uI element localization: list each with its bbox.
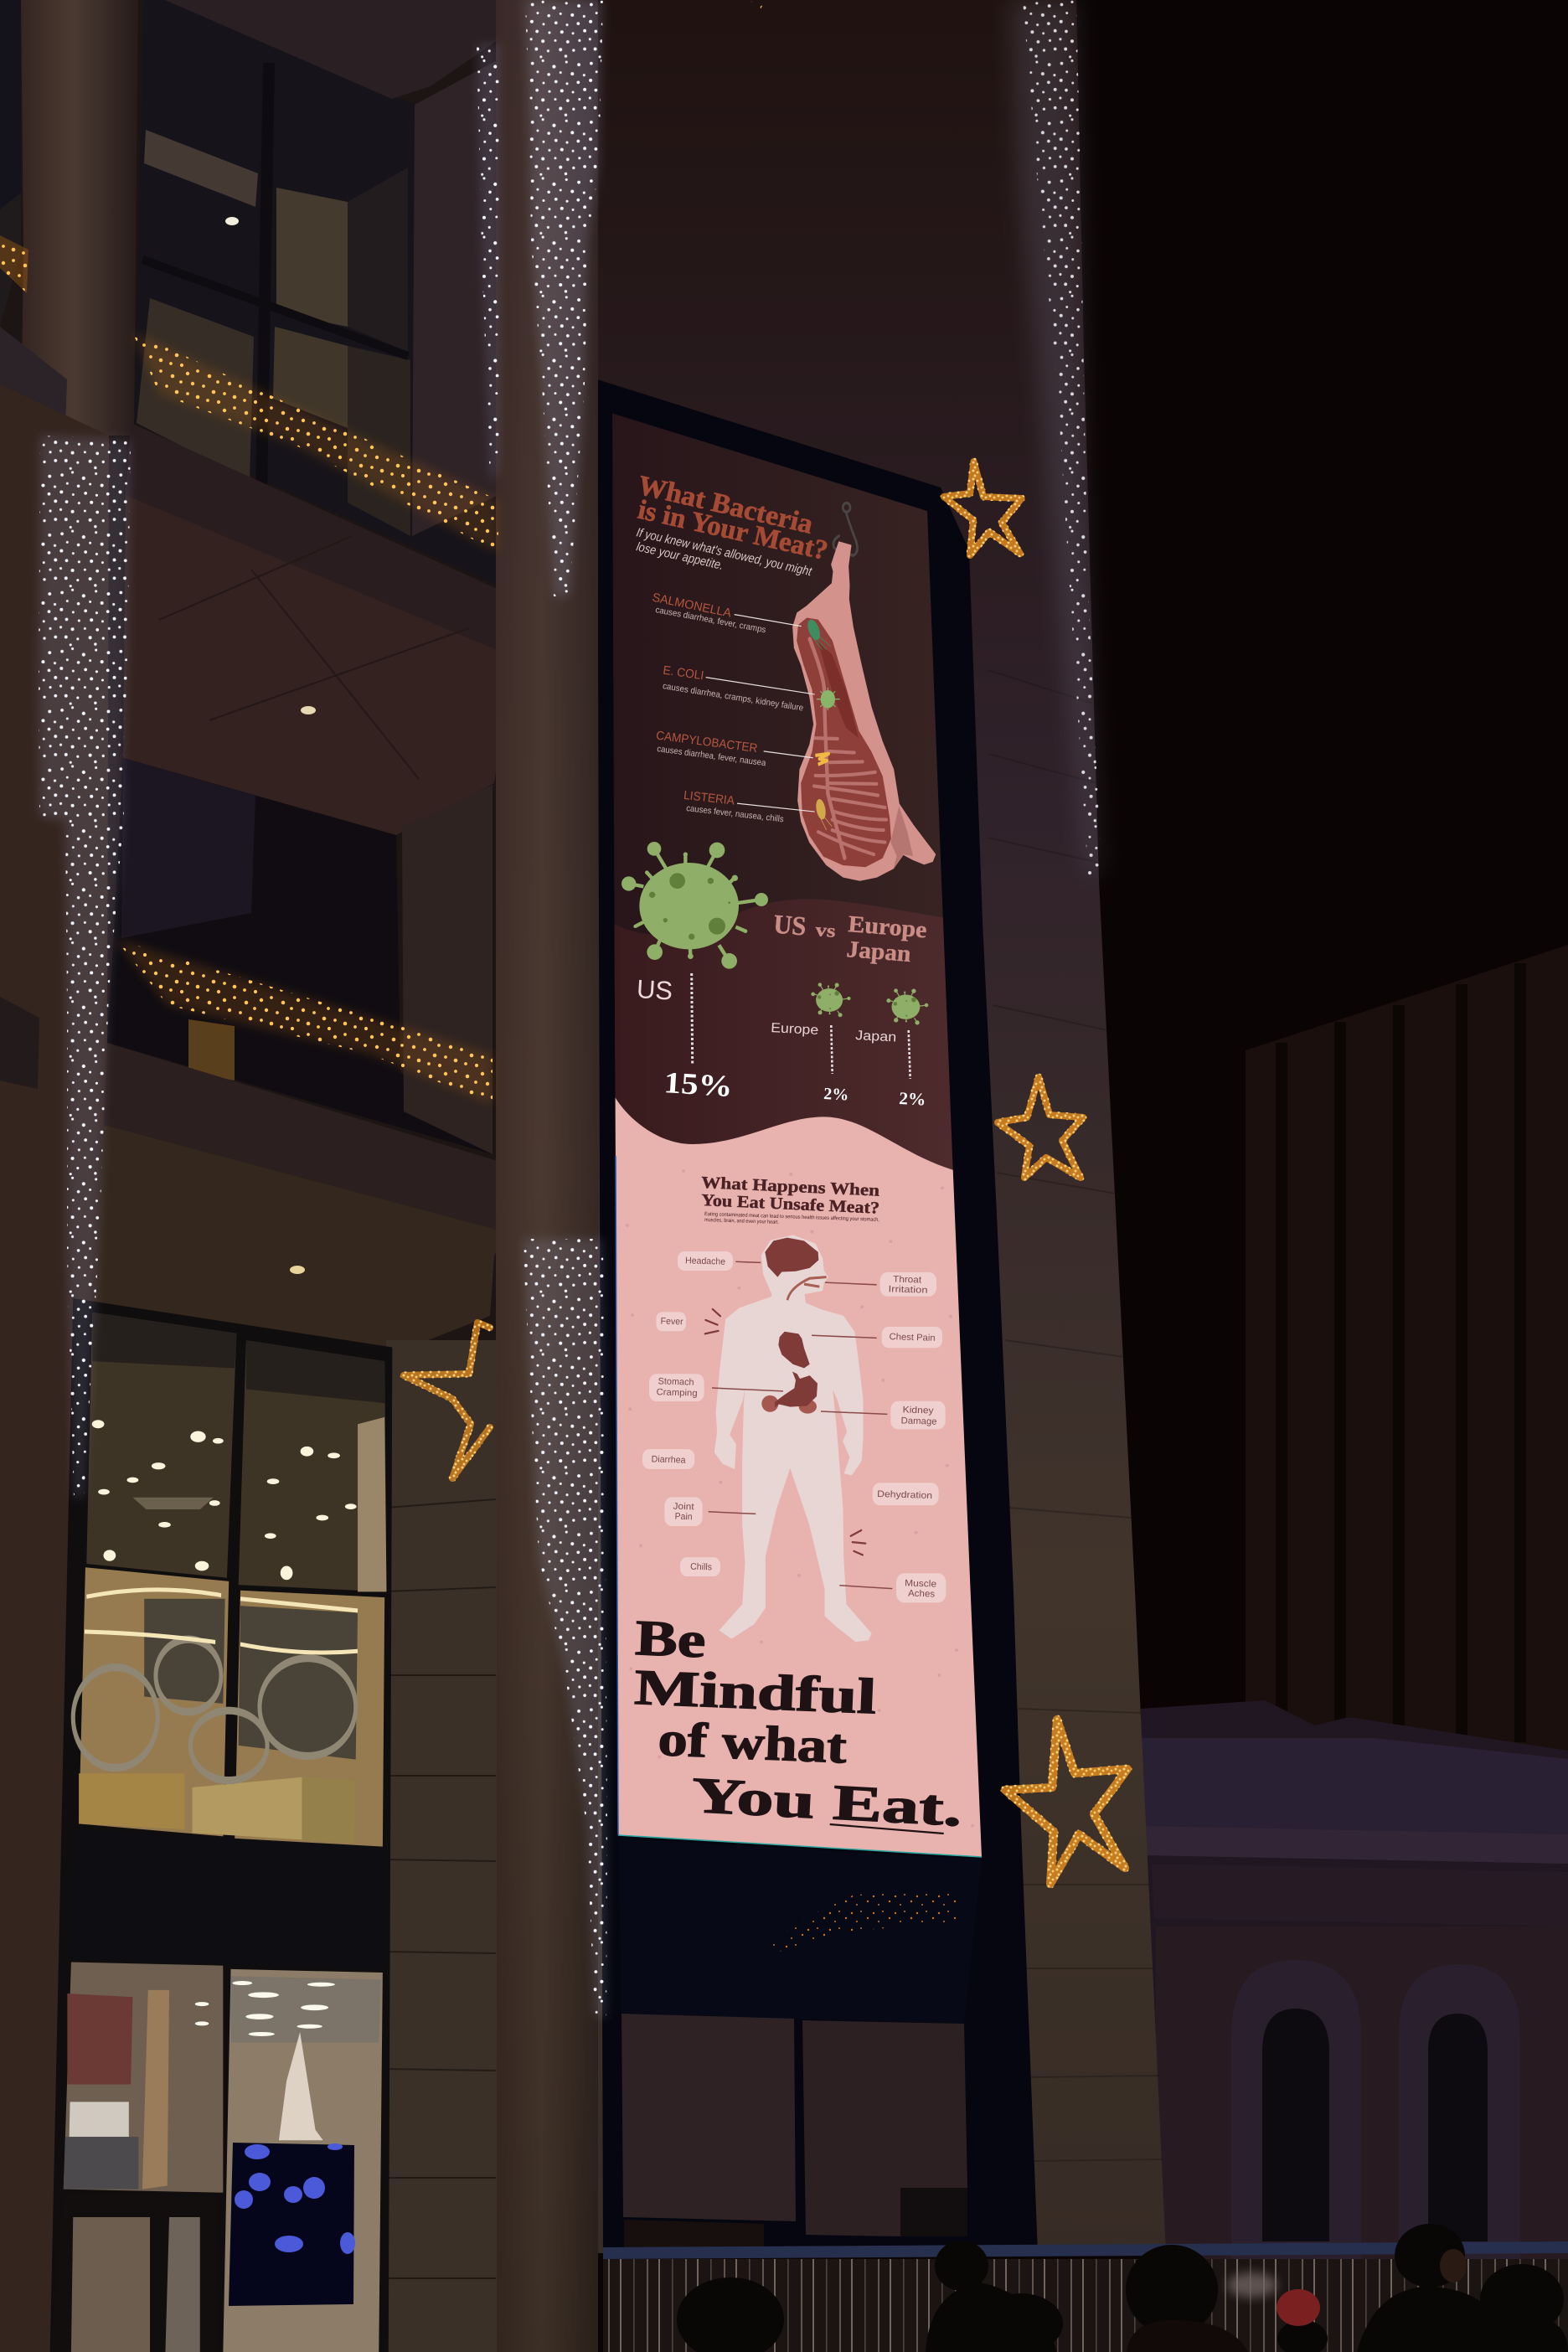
pain ticks	[705, 1309, 865, 1555]
lobby star	[404, 1323, 490, 1478]
billboard poster	[612, 414, 982, 1856]
symptom labels: Cramping	[656, 1387, 698, 1399]
comparison heading: vs	[815, 919, 837, 941]
symptom labels: Irritation	[888, 1284, 928, 1296]
salmonella label: causes diarrhea, fever, cramps	[654, 605, 766, 635]
bacteria leader lines	[706, 615, 815, 812]
center column	[496, 0, 598, 2352]
subtitle: If you knew what's allowed, you might	[635, 525, 813, 579]
organ: heart	[778, 1332, 810, 1368]
organ: stomach	[775, 1372, 818, 1407]
closing slogan	[633, 1610, 963, 1837]
Europe stat	[771, 983, 851, 1105]
symptom labels: Kidney	[902, 1405, 934, 1416]
US stat	[636, 973, 734, 1103]
symptom labels: Joint	[673, 1502, 694, 1512]
closing slogan: You Eat.	[690, 1767, 963, 1837]
old building with arches	[1141, 1700, 1568, 2352]
icon: small virus Europe	[811, 983, 851, 1017]
symptoms heading	[701, 1173, 880, 1218]
closing slogan: Be	[634, 1610, 707, 1668]
symptom labels: Stomach	[658, 1376, 694, 1388]
symptom labels: Dehydration	[877, 1489, 932, 1501]
icon: hook	[833, 503, 858, 556]
symptoms heading: You Eat Unsafe Meat?	[701, 1191, 880, 1218]
Europe stat: Europe	[771, 1021, 819, 1038]
bacteria labels	[651, 591, 804, 824]
pink confetti dots	[626, 1169, 974, 1828]
symptom leader lines	[709, 1261, 892, 1589]
symptom labels: Damage	[900, 1416, 937, 1427]
bacteria: e. coli	[817, 688, 840, 710]
wall courses	[988, 670, 1163, 2161]
comparison heading: US	[772, 909, 807, 941]
icon: large green virus	[622, 842, 768, 969]
subtitle	[636, 528, 812, 576]
campylobacter label: causes diarrhea, fever, nausea	[657, 744, 766, 768]
organ: throat	[787, 1277, 827, 1300]
subtitle: lose your appetite.	[635, 539, 725, 573]
symptom labels: Aches	[908, 1589, 936, 1600]
billboard frame and lower window	[597, 379, 1038, 2253]
meat shaded flap	[890, 806, 913, 869]
white icicle lights	[39, 0, 1101, 2017]
tower wall	[596, 0, 1166, 2253]
body silhouette	[714, 1235, 871, 1642]
e. coli label: causes diarrhea, cramps, kidney failure	[662, 681, 804, 714]
meat outer fat	[793, 542, 936, 880]
human body diagram	[642, 1235, 946, 1642]
ribs and spine	[810, 639, 886, 858]
poster background top	[612, 414, 950, 1089]
far striped building	[1246, 945, 1568, 1767]
poster pink lower section	[615, 1097, 982, 1856]
salmonella label: SALMONELLA	[651, 591, 733, 621]
meat dark muscle	[818, 641, 859, 738]
Japan stat	[855, 988, 928, 1110]
meat red flesh	[797, 618, 890, 867]
symptom labels: Headache	[685, 1256, 725, 1267]
bacteria: campylobacter	[815, 754, 828, 765]
icon: small virus Japan	[886, 988, 928, 1025]
salmonella label	[652, 593, 766, 633]
symptoms heading: What Happens When	[701, 1173, 880, 1200]
US stat: 15%	[663, 1065, 734, 1103]
bacteria: listeria	[814, 797, 832, 830]
symptom labels: Chills	[690, 1562, 713, 1572]
stone wall beside lobby	[386, 1340, 497, 2352]
closing slogan: of what	[657, 1711, 848, 1773]
organ: kidneys	[761, 1395, 817, 1414]
US stat: US	[636, 974, 673, 1006]
blue video screen	[229, 2143, 355, 2306]
symptom labels: Pain	[674, 1512, 693, 1522]
Japan stat: 2%	[899, 1088, 926, 1110]
orange balcony lights	[0, 0, 766, 1104]
title	[637, 476, 828, 560]
crowd silhouettes	[677, 2224, 1568, 2352]
e. coli label	[662, 664, 804, 714]
title: is in Your Meat?	[635, 495, 831, 566]
Japan stat: Japan	[855, 1029, 897, 1045]
wall stars	[944, 462, 1127, 1884]
comparison heading: Japan	[845, 936, 912, 967]
star middle right	[998, 1077, 1083, 1178]
listeria label: LISTERIA	[683, 789, 735, 808]
lobby windows	[50, 1298, 392, 2352]
symptom labels: Fever	[660, 1317, 683, 1327]
listeria label	[683, 791, 784, 823]
symptom labels: Chest Pain	[889, 1332, 936, 1344]
star top right	[944, 462, 1022, 555]
symptom labels	[651, 1256, 937, 1600]
closing slogan: Mindful	[633, 1659, 878, 1725]
comparison heading: Europe	[847, 911, 928, 943]
poster edge glints	[616, 1156, 982, 1857]
symptoms intro: Eating contaminated meat can lead to serious health issues affecting your stomach,	[704, 1211, 879, 1223]
meat cut illustration	[706, 503, 936, 880]
organ: brain	[765, 1238, 818, 1277]
campylobacter label: CAMPYLOBACTER	[655, 729, 758, 756]
title: What Bacteria	[635, 471, 816, 540]
left column	[0, 384, 109, 2352]
star lower right	[1005, 1720, 1127, 1884]
bacteria: salmonella	[805, 617, 831, 649]
symptoms intro: muscles, brain, and even your heart.	[704, 1217, 779, 1225]
comparison heading	[772, 909, 928, 967]
street railing	[603, 2241, 1568, 2352]
campylobacter label	[657, 731, 766, 766]
listeria label: causes fever, nausea, chills	[686, 803, 784, 824]
symptom labels: Diarrhea	[651, 1454, 687, 1466]
symptom labels: Muscle	[905, 1578, 936, 1590]
Europe stat: 2%	[823, 1085, 849, 1105]
e. coli label: E. COLI	[662, 664, 704, 683]
left: second floor window and balcony	[94, 758, 525, 1354]
left: top floor window and ceiling	[0, 0, 596, 2352]
symptom pills	[642, 1251, 946, 1602]
poster middle wave	[611, 899, 977, 1200]
symptom labels: Throat	[893, 1274, 921, 1286]
